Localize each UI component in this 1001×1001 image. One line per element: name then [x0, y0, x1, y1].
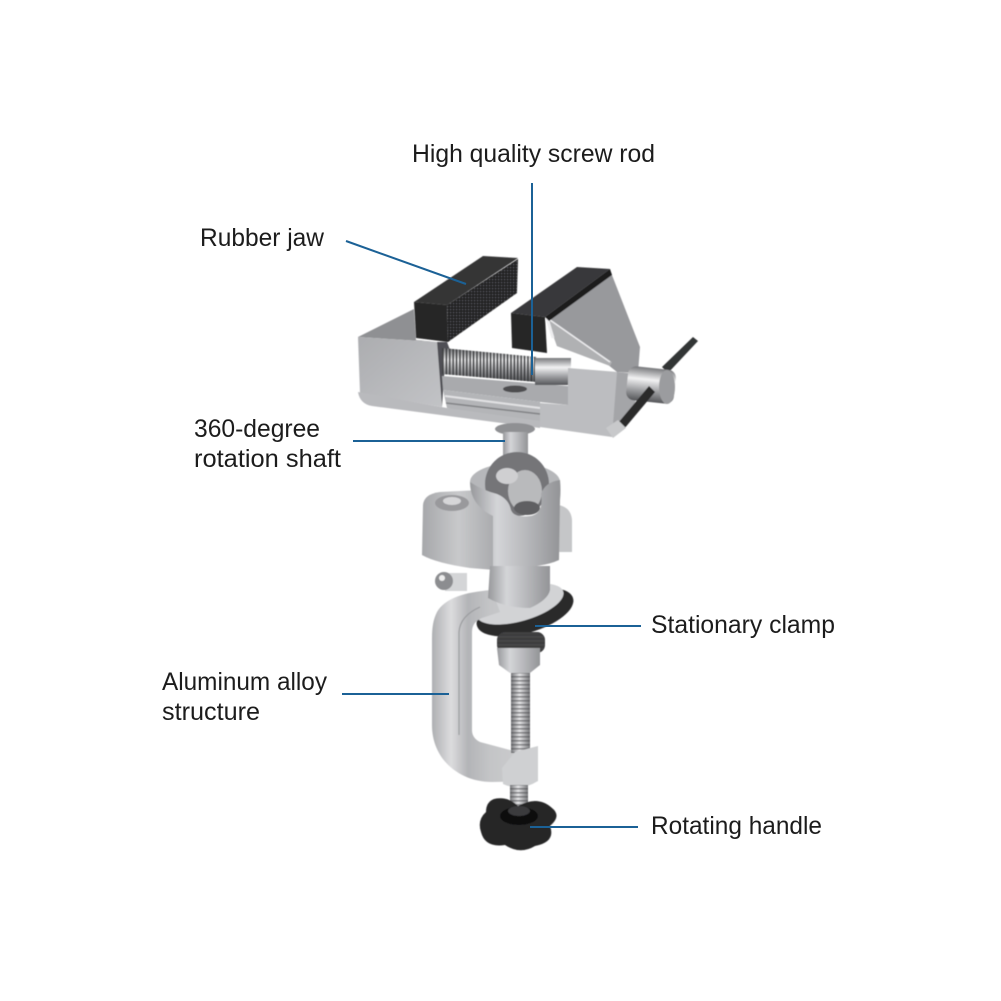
screw rod — [442, 348, 571, 385]
clamp lower block — [502, 746, 538, 787]
T-handle and lead screw end — [606, 337, 698, 438]
stem below housing — [488, 566, 550, 608]
leader: aluminum alloy — [342, 693, 449, 695]
C-clamp frame — [432, 590, 538, 782]
leader: rotating handle — [530, 826, 638, 828]
leader: rubber jaw — [346, 241, 466, 284]
moving jaw block — [540, 270, 640, 437]
label: Rotating handle: Rotating handle — [651, 812, 822, 840]
label: Aluminum alloy structure: structure — [162, 698, 260, 726]
knurled knob and hex nut — [497, 632, 545, 673]
label: High quality screw rod: High quality screw rod — [412, 140, 655, 168]
vise base: left fixed block — [358, 309, 450, 407]
metal flange ring — [472, 575, 568, 633]
rotating handle knob — [480, 798, 557, 850]
swivel shaft and ball socket — [470, 423, 560, 516]
label: 360-degree rotation shaft: 360-degree — [194, 415, 320, 443]
leader lines — [342, 183, 641, 827]
right side bump — [558, 505, 572, 552]
ball cup housing — [470, 480, 560, 568]
leader: stationary clamp — [535, 625, 641, 627]
clamp screw upper — [511, 673, 530, 753]
frame inner rib — [459, 607, 480, 735]
clamp screw lower — [510, 785, 528, 812]
black rubber clamp pad — [471, 578, 579, 646]
left rubber jaw — [414, 256, 518, 342]
vise product photo illustration — [358, 256, 698, 850]
label: Rubber jaw: Rubber jaw — [200, 224, 325, 252]
label: 360-degree rotation shaft: rotation shaft — [194, 445, 341, 473]
right rubber jaw — [511, 267, 612, 353]
vise bed, rails and base plate — [358, 376, 568, 428]
leader: rotation shaft — [353, 440, 505, 442]
left clamp lobe — [422, 490, 495, 570]
label: Aluminum alloy structure: Aluminum alloy — [162, 668, 327, 696]
leader: screw rod — [531, 183, 533, 375]
label: Stationary clamp: Stationary clamp — [651, 611, 835, 639]
retaining ball pin — [435, 572, 467, 591]
